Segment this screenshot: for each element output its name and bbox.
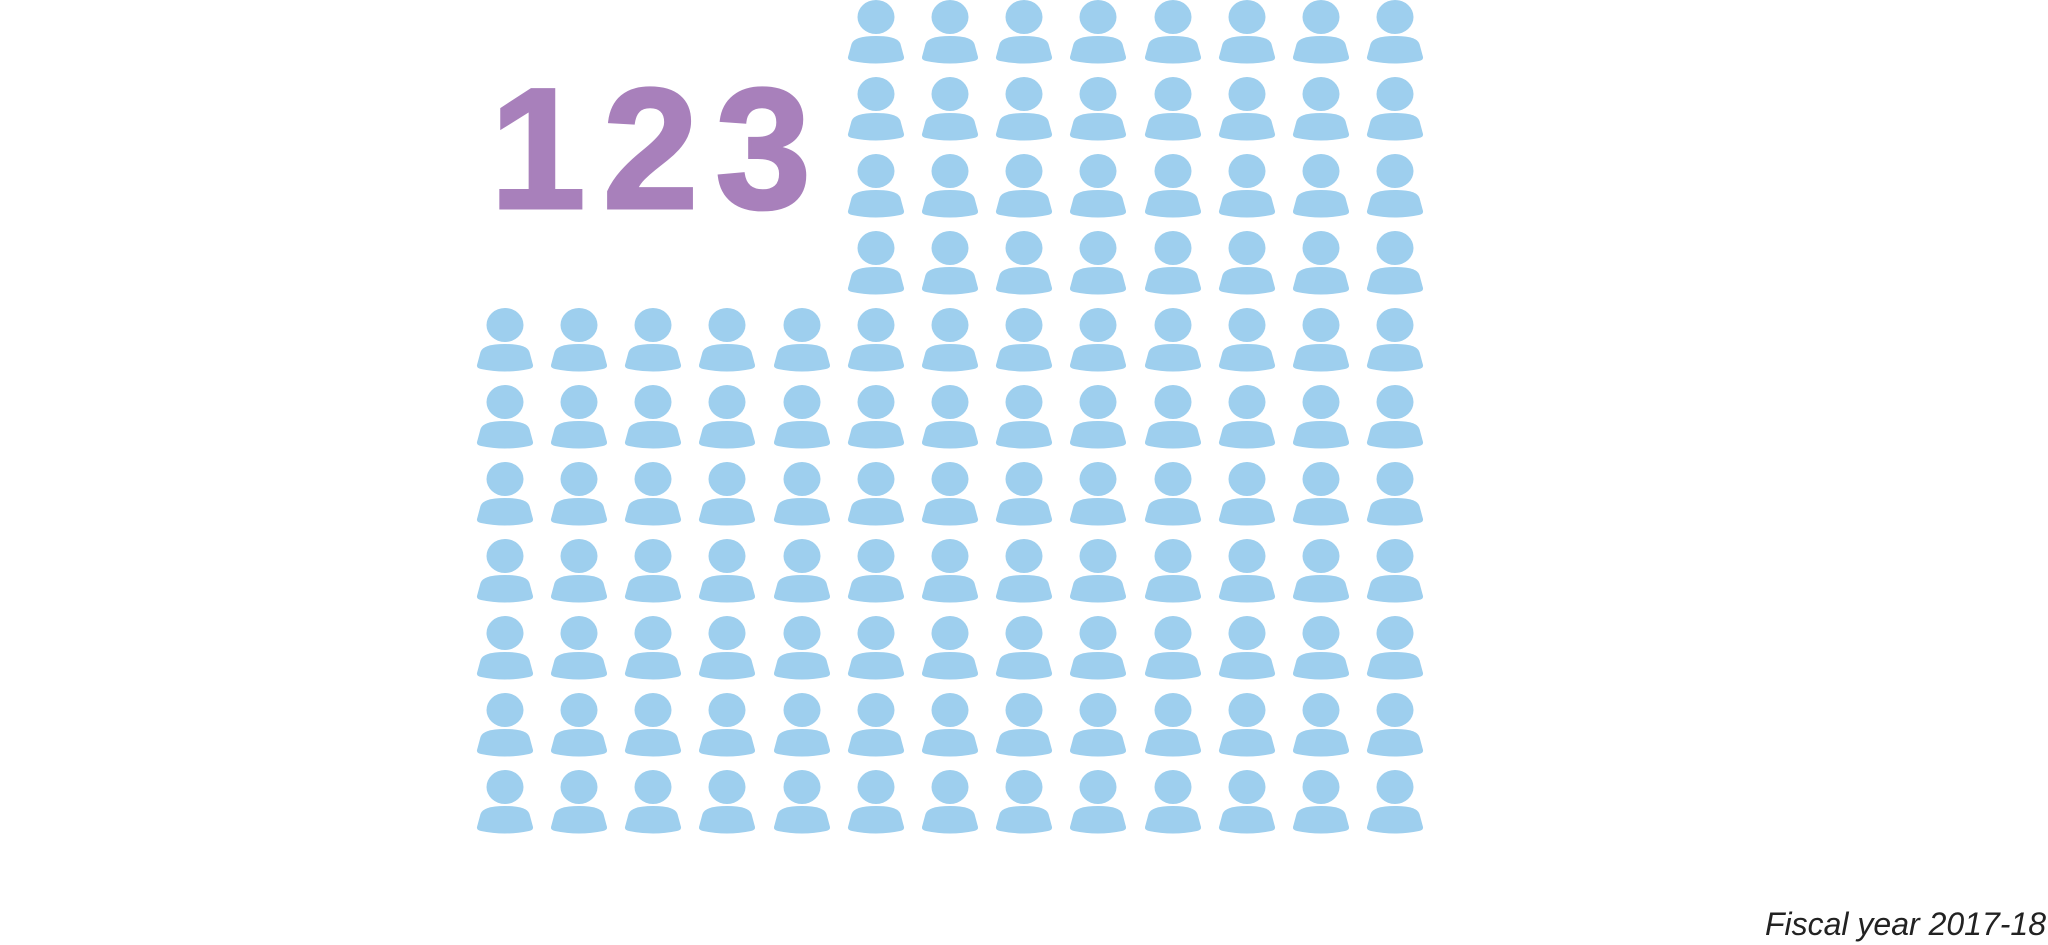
caption: fiscal year: Fiscal year 2017-18 — [1765, 906, 2046, 942]
big number 123: 123 — [490, 53, 828, 245]
